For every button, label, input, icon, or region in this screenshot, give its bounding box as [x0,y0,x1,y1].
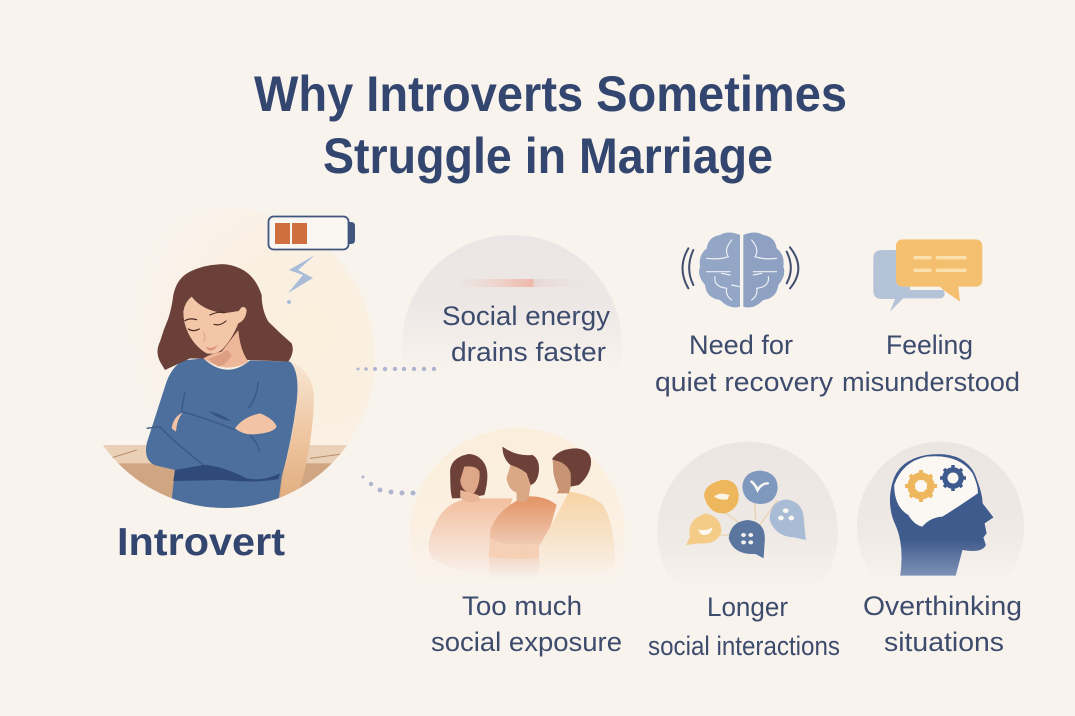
text: feeling misunderstood: misunderstood [842,367,1020,397]
panel: introvert figure [103,216,375,556]
panel: overthinking situations [857,442,1024,657]
connector: dotted line top [356,367,436,371]
title: Struggle in Marriage [323,128,773,184]
connector: dotted curve bottom [362,476,416,496]
text: need for quiet recovery [655,330,834,397]
icon: blue gear [940,465,966,491]
title [254,66,847,184]
text: social energy: drains faster [451,337,606,367]
text: overthinking situations: Overthinking [863,591,1022,621]
illustration: three people [410,428,625,642]
text: social energy [442,301,610,367]
text: too much social exposure: Too much [462,591,582,621]
text: overthinking situations: situations [884,627,1004,657]
text: feeling misunderstood: Feeling [886,330,973,360]
text: social energy: Social energy [442,301,610,331]
text: overthinking situations [863,591,1022,657]
text: longer social interactions: social interactions [648,631,840,661]
text: feeling misunderstood [842,330,1020,397]
panel: social energy drains faster [402,235,622,455]
label: Introvert: Introvert [117,521,285,564]
text: too much social exposure [431,591,622,657]
illustration: woman with crossed arms [103,216,375,508]
panel: too much social exposure [410,428,625,657]
text: longer social interactions: Longer [707,592,788,622]
panel: longer social interactions [648,442,840,661]
text: too much social exposure: social exposure [431,627,622,657]
title: Why Introverts Sometimes [254,66,847,122]
icon: head silhouette [857,442,1024,612]
icon: fading circle with drain bar [402,235,622,455]
icon: lightning bolt [288,255,315,293]
text: need for quiet recovery: quiet recovery [655,367,834,397]
panel: need for quiet recovery [655,232,834,397]
panel: feeling misunderstood [842,239,1020,397]
text: longer social interactions [648,592,840,661]
text: need for quiet recovery: Need for [689,330,793,360]
icon: gold gear [905,470,937,502]
icon: brain with sound waves [682,232,798,307]
icon: speech bubbles [873,239,982,312]
icon: low battery [268,216,355,250]
icon: connected speech bubbles [657,442,838,622]
